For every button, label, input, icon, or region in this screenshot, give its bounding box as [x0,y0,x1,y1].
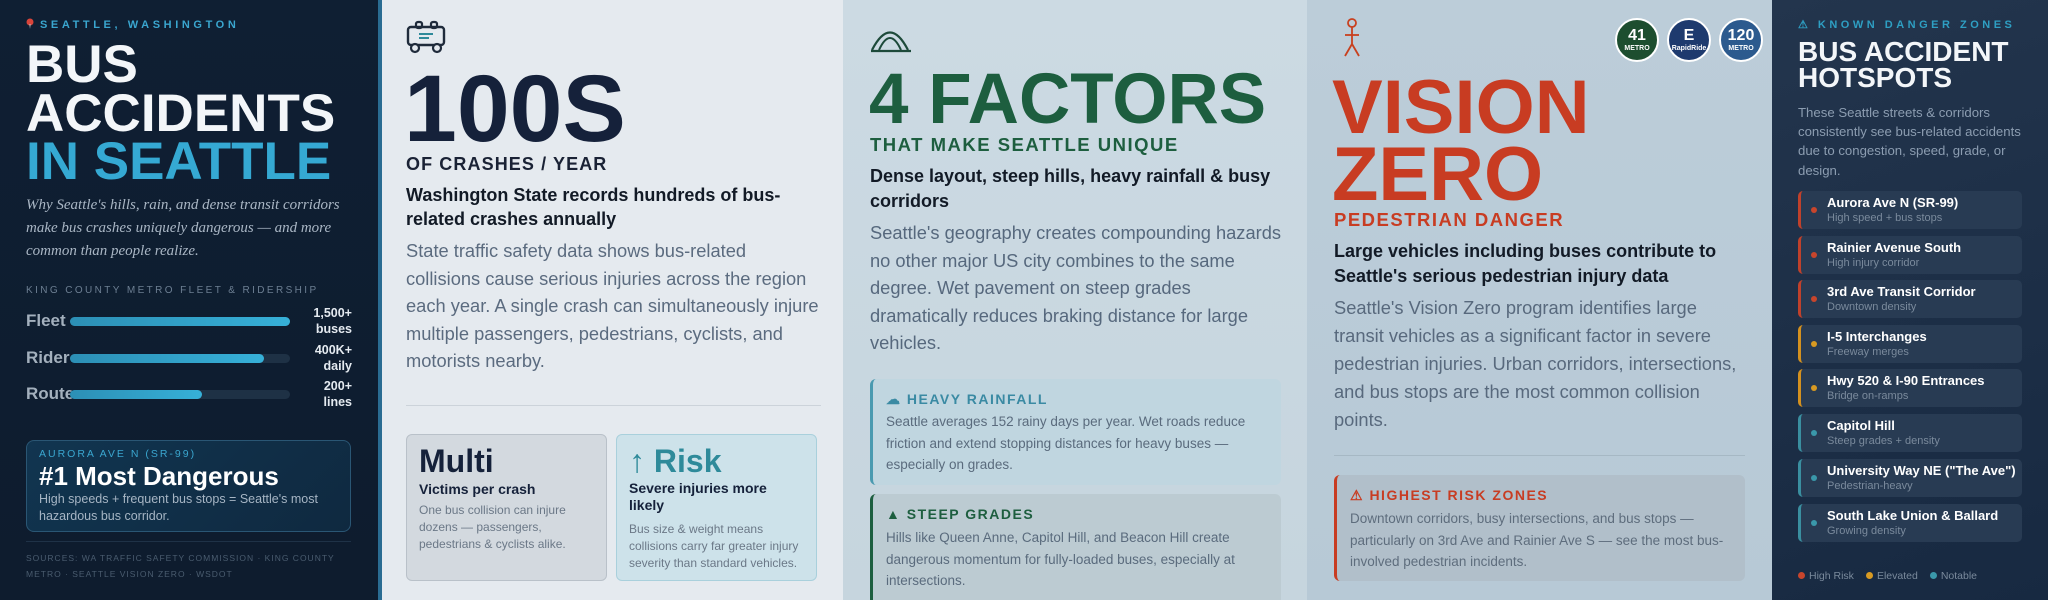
title [26,35,335,191]
bar: routes: Route [26,384,74,403]
body text [870,222,1281,353]
hotspot list [1798,191,2022,542]
item: aurora [1798,191,2022,229]
card: risk: ↑ Risk [629,443,721,479]
title [1798,36,2009,93]
item: rainier: Rainier Avenue South [1827,240,1961,254]
item: capitol hill: Capitol Hill [1827,418,1895,433]
subheading: THAT MAKE SEATTLE UNIQUE [870,134,1179,155]
item: hwy 520: Bridge on-ramps [1827,390,1908,402]
body text: State traffic safety data shows bus-related [406,240,746,261]
big number: 100S [404,56,626,162]
item: university way [1798,459,2022,497]
panel: crashes per year [382,0,843,600]
fleet heading: KING COUNTY METRO FLEET & RIDERSHIP [26,285,319,296]
item: capitol hill [1798,414,2022,452]
item: rainier: High injury corridor [1827,256,1919,268]
badge: 120: METRO [1728,45,1754,52]
item: rainier [1798,236,2022,274]
item: university way: University Way NE ("The Ave") [1827,463,2016,478]
card: steep grades [870,494,1281,600]
badge: 120 [1719,18,1763,62]
bar: riders: 400K+ [315,343,352,357]
card: risk [616,434,817,581]
bar: fleet [26,306,352,336]
callout: most dangerous: High speeds + frequent bus stops = Seattle's most hazardous bus corridor. [39,492,318,522]
body text: points. [1334,409,1388,430]
card: multi victims: One bus collision can injure dozens — passengers, pedestrians & cyclists alike. [419,503,566,551]
card: steep grades: Hills like Queen Anne, Capitol Hill, and Beacon Hill create dangerous momentum for fully-loaded buses, especially at intersections. [886,530,1235,588]
bar: routes: lines [324,395,352,409]
item: 3rd ave: 3rd Ave Transit Corridor [1827,284,1976,299]
subheading: PEDESTRIAN DANGER [1334,209,1564,230]
item: 3rd ave [1798,280,2022,318]
body text: collisions cause serious injuries across the region [406,268,806,289]
big heading: ZERO [1332,132,1543,217]
badge: 41: 41 [1628,27,1646,44]
bar: fleet: 1,500+ [313,306,352,320]
body text: and bus stops are the most common collision [1334,381,1700,402]
badge: 41 [1615,18,1659,62]
bar: routes: 200+ [324,379,352,393]
card: multi victims [406,434,607,581]
body text [406,240,819,371]
big heading [1332,65,1590,217]
bar: riders: Rider [26,348,69,367]
bar: fleet: buses [316,322,352,336]
title: BUS ACCIDENT [1798,36,2009,67]
card: highest risk zones [1334,475,1745,581]
card: risk: Severe injuries more likely [629,480,767,513]
item: slu ballard [1798,504,2022,542]
item: hwy 520 [1798,369,2022,407]
card: risk: Bus size & weight means collisions carry far greater injury severity than standard vehicles. [629,522,798,570]
sources: SOURCES: WA TRAFFIC SAFETY COMMISSION · KING COUNTY METRO · SEATTLE VISION ZERO · WSDOT [26,553,335,579]
label: ⚠ KNOWN DANGER ZONES [1798,19,2015,31]
card: multi victims: Multi [419,443,494,479]
item: aurora: Aurora Ave N (SR-99) [1827,195,1958,210]
body text: multiple passengers, pedestrians, cyclists, and [406,323,783,344]
callout: most dangerous: #1 Most Dangerous [39,461,279,491]
card: highest risk zones: ⚠ HIGHEST RISK ZONES [1350,487,1548,503]
bar: riders [26,343,352,373]
card: heavy rainfall [870,379,1281,485]
body text: each year. A single crash can simultaneously injure [406,295,819,316]
bar: riders: daily [324,359,352,373]
item: slu ballard: Growing density [1827,525,1906,537]
body text: vehicles. [870,332,941,353]
callout: most dangerous [26,440,351,532]
title: BUS [26,35,138,94]
body text [1334,297,1736,430]
big heading: VISION [1332,65,1590,150]
badge: 41: METRO [1624,45,1650,52]
subtitle: Why Seattle's hills, rain, and dense transit corridors make bus crashes uniquely dangerous — and more common than people realize. [26,197,340,259]
location label: SEATTLE, WASHINGTON [40,19,239,31]
body text: no other major US city combines to the same [870,250,1235,271]
card: highest risk zones: Downtown corridors, busy intersections, and bus stops — particularly on 3rd Ave and Rainier Ave S — see the most bus-involved pedestrian incidents. [1350,511,1723,569]
item: aurora: High speed + bus stops [1827,212,1942,224]
card: multi victims: Victims per crash [419,481,535,497]
card: heavy rainfall: Seattle averages 152 rainy days per year. Wet roads reduce friction and extend stopping distances for heavy buses — especially on grades. [886,414,1245,472]
headline: Dense layout, steep hills, heavy rainfall & busy corridors [870,166,1270,211]
body text: motorists nearby. [406,350,545,371]
badge: E: RapidRide [1672,45,1706,52]
bar: routes [26,379,352,409]
badge: 120: 120 [1728,27,1754,44]
item: i-5 [1798,325,2022,363]
icon: hills [871,31,911,52]
item: i-5: Freeway merges [1827,346,1909,358]
headline: Large vehicles including buses contribute to Seattle's serious pedestrian injury data [1334,241,1716,286]
body text: pedestrian injuries. Urban corridors, intersections, [1334,353,1736,374]
route badges [1615,18,1763,62]
subheading: OF CRASHES / YEAR [406,154,607,174]
big number: 4 FACTORS [869,60,1266,139]
body text: transit vehicles as a significant factor in severe [1334,325,1711,346]
item: i-5: I-5 Interchanges [1827,329,1927,344]
title: IN SEATTLE [26,132,331,191]
panel: intro [0,0,382,600]
body text: Seattle's geography creates compounding hazards [870,222,1281,243]
item: university way: Pedestrian-heavy [1827,480,1913,492]
item: hwy 520: Hwy 520 & I-90 Entrances [1827,373,1985,388]
item: 3rd ave: Downtown density [1827,301,1916,313]
body text: Seattle's Vision Zero program identifies large [1334,297,1697,318]
panel: 4 factors [843,0,1307,600]
item: capitol hill: Steep grades + density [1827,435,1940,447]
title: HOTSPOTS [1798,62,1952,93]
bar: fleet: Fleet [26,311,66,330]
icon: pedestrian [1344,18,1360,56]
panel: vision zero [1307,0,1772,600]
description: These Seattle streets & corridors consistently see bus-related accidents due to congestion, speed, grade, or design. [1798,105,2021,178]
title: ACCIDENTS [26,84,335,142]
body text: degree. Wet pavement on steep grades [870,277,1191,298]
item: slu ballard: South Lake Union & Ballard [1827,508,1998,523]
icon: bus [406,20,446,54]
badge: E [1667,18,1711,62]
panel: hotspots [1772,0,2048,600]
card: steep grades: ▲ STEEP GRADES [886,506,1034,522]
headline: Washington State records hundreds of bus-related crashes annually [406,185,780,229]
callout: most dangerous: AURORA AVE N (SR-99) [39,448,196,460]
body text: dramatically reduces braking distance for large [870,305,1248,326]
legend: High Risk Elevated Notable [1809,570,1977,582]
card: heavy rainfall: ☁ HEAVY RAINFALL [886,391,1048,407]
badge: E: E [1684,27,1694,44]
bar chart: fleet [26,306,352,409]
